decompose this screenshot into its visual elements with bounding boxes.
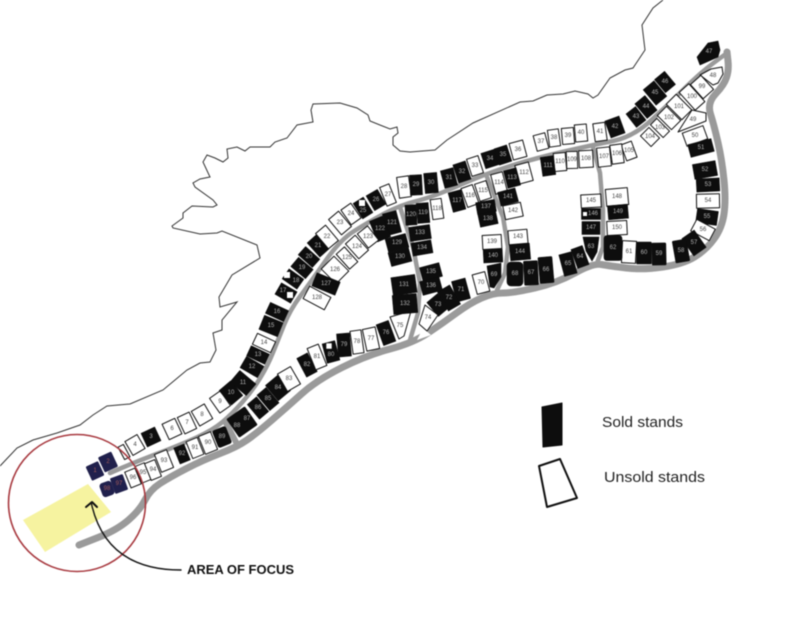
stands: upper row 3 to 16: 4 bbox=[133, 442, 137, 448]
stands: central block 118 to 136: 128 bbox=[312, 295, 323, 301]
stands: upper row 31 to 47: 46 bbox=[662, 79, 669, 85]
stands: lower row 75 to 82: 77 bbox=[368, 336, 375, 342]
stands: north-east cluster 48, 99 to 104: 104 bbox=[645, 134, 656, 140]
stands: upper row 17 to 30: 26 bbox=[373, 197, 380, 203]
stands: upper row 31 to 47: 41 bbox=[597, 129, 604, 135]
stands: centre blocks 112 to 117 and 137 to 147: 115 bbox=[478, 188, 488, 194]
stands: eastern loop 49 to 62: 53 bbox=[705, 182, 712, 188]
stands: central block 118 to 136: 122 bbox=[375, 226, 386, 232]
stands: southern row 63 to 73: 66 bbox=[543, 267, 550, 273]
legend: sold stands bbox=[542, 403, 683, 447]
stands: upper row 17 to 30: 23 bbox=[337, 220, 344, 226]
stands: upper row 17 to 30: 29 bbox=[413, 182, 420, 188]
stands: branch 105 to 111 and 148 to 150 bbox=[540, 141, 637, 236]
stands: upper row 31 to 47: 34 bbox=[487, 156, 494, 162]
stands: central block 118 to 136: 127 bbox=[321, 281, 332, 287]
stands: upper row 31 to 47: 37 bbox=[538, 139, 545, 145]
area of focus caption: AREA OF FOCUS bbox=[187, 563, 294, 577]
stands: lower row 83 to 96: 93 bbox=[161, 458, 168, 464]
stands: lower row 75 to 82: 76 bbox=[383, 330, 390, 336]
stands: upper row 3 to 16: 15 bbox=[268, 323, 275, 329]
stands: upper row 31 to 47: 42 bbox=[612, 124, 619, 130]
stands: upper row 31 to 47: 39 bbox=[565, 133, 572, 139]
stands: eastern loop 49 to 62: 51 bbox=[698, 145, 705, 151]
stands: lower row 75 to 82: 78 bbox=[354, 339, 361, 345]
stands: upper row 31 to 47: 33 bbox=[472, 163, 479, 169]
stands: upper row 31 to 47: 31 bbox=[446, 175, 453, 181]
stands: centre blocks 112 to 117 and 137 to 147: 138 bbox=[483, 216, 494, 222]
stands: centre blocks 112 to 117 and 137 to 147: 147 bbox=[586, 225, 597, 231]
stands: centre blocks 112 to 117 and 137 to 147: 112 bbox=[519, 170, 529, 176]
stands: north-east cluster 48, 99 to 104 bbox=[640, 67, 723, 147]
stands: upper row 17 to 30: 27 bbox=[385, 192, 392, 198]
stands: eastern loop 49 to 62: 52 bbox=[702, 167, 709, 173]
road network bbox=[79, 52, 728, 545]
stands: lower row 83 to 96: 90 bbox=[205, 440, 212, 446]
stands: southern row 63 to 73: 64 bbox=[577, 254, 584, 260]
stands: central block 118 to 136: 125 bbox=[342, 255, 353, 261]
stands: centre blocks 112 to 117 and 137 to 147: 114 bbox=[494, 180, 504, 186]
stands: central block 118 to 136: 129 bbox=[392, 240, 403, 246]
stands: central block 118 to 136: 120 bbox=[406, 212, 417, 218]
white wedge between roads near stand 74 bbox=[417, 328, 431, 340]
stands: branch 105 to 111 and 148 to 150: 107 bbox=[599, 154, 610, 160]
stands: eastern loop 49 to 62: 62 bbox=[610, 245, 617, 251]
stands: branch 105 to 111 and 148 to 150: 149 bbox=[613, 209, 624, 215]
stands: central block 118 to 136 bbox=[303, 198, 444, 315]
stands: branch 105 to 111 and 148 to 150: 110 bbox=[555, 159, 565, 165]
stands: central block 118 to 136: 126 bbox=[330, 267, 341, 273]
stands: southern row 63 to 73 bbox=[419, 237, 599, 331]
stands: upper row 31 to 47: 43 bbox=[633, 114, 640, 120]
stands: southern row 63 to 73: 71 bbox=[458, 287, 465, 293]
stands: central block 118 to 136: 121 bbox=[387, 220, 398, 226]
stands: central block 118 to 136: 130 bbox=[395, 254, 406, 260]
stands: upper row 17 to 30: 25 bbox=[360, 208, 367, 214]
stands: lower row 83 to 96: 86 bbox=[255, 405, 262, 411]
stands: lower row 83 to 96: 84 bbox=[275, 385, 282, 391]
stands: centre blocks 112 to 117 and 137 to 147: 141 bbox=[503, 194, 514, 200]
stands: lower row 83 to 96: 88 bbox=[234, 423, 241, 429]
stands: eastern loop 49 to 62: 54 bbox=[705, 198, 712, 204]
stands: lower row 83 to 96: 83 bbox=[286, 376, 293, 382]
stands: upper row 31 to 47: 45 bbox=[652, 90, 659, 96]
stands: upper row 31 to 47: 40 bbox=[578, 130, 585, 136]
stands: upper row 17 to 30: 18 bbox=[293, 278, 300, 284]
stands: central block 118 to 136: 131 bbox=[399, 282, 410, 288]
stands: north-east cluster 48, 99 to 104: 103 bbox=[655, 125, 666, 131]
stands: north-east cluster 48, 99 to 104: 48 bbox=[710, 73, 717, 79]
stands: centre blocks 112 to 117 and 137 to 147: 113 bbox=[507, 175, 517, 181]
stands: central block 118 to 136: 124 bbox=[352, 244, 363, 250]
stands: upper row 3 to 16 bbox=[118, 302, 289, 460]
stands: southern row 63 to 73: 70 bbox=[478, 280, 485, 286]
stands: upper row 17 to 30: 21 bbox=[315, 243, 322, 249]
stands: centre blocks 112 to 117 and 137 to 147: 143 bbox=[513, 234, 524, 240]
stands: branch 105 to 111 and 148 to 150: 109 bbox=[567, 157, 578, 163]
stands: eastern loop 49 to 62 bbox=[604, 110, 720, 265]
stands: north-east cluster 48, 99 to 104: 101 bbox=[674, 104, 685, 110]
stands: upper row 3 to 16: 8 bbox=[200, 412, 204, 418]
stands: lower row 83 to 96: 92 bbox=[179, 451, 186, 457]
stands: central block 118 to 136: 133 bbox=[415, 230, 426, 236]
stands: upper row 17 to 30: 17 bbox=[280, 288, 287, 294]
stands: north-east cluster 48, 99 to 104: 100 bbox=[687, 94, 698, 100]
stands: centre blocks 112 to 117 and 137 to 147: 117 bbox=[452, 198, 462, 204]
stands: area of focus, navy stands 1, 2, 97, 98: 1 bbox=[93, 468, 97, 474]
stands: north-east cluster 48, 99 to 104: 102 bbox=[664, 115, 675, 121]
stands: lower row 83 to 96: 89 bbox=[219, 434, 226, 440]
stands: lower row 83 to 96: 91 bbox=[192, 445, 199, 451]
stands: north-east cluster 48, 99 to 104: 99 bbox=[699, 84, 706, 90]
stands: southern row 63 to 73: 72 bbox=[446, 295, 453, 301]
stands: centre blocks 112 to 117 and 137 to 147: 146 bbox=[588, 211, 599, 217]
arrow to area of focus bbox=[86, 502, 181, 570]
stands: central block 118 to 136: 135 bbox=[426, 269, 437, 275]
stands: southern row 63 to 73: 68 bbox=[512, 271, 519, 277]
stands: centre blocks 112 to 117 and 137 to 147 bbox=[448, 162, 601, 263]
stands: upper row 17 to 30: 22 bbox=[324, 234, 331, 240]
stands: upper row 31 to 47: 32 bbox=[459, 169, 466, 175]
legend: sold stands: Sold stands bbox=[602, 414, 683, 431]
stands: upper row 31 to 47: 38 bbox=[551, 135, 558, 141]
coastline boundary bbox=[0, 0, 663, 466]
stands: central block 118 to 136: 136 bbox=[426, 283, 437, 289]
stands: centre blocks 112 to 117 and 137 to 147: 144 bbox=[515, 249, 526, 255]
stands: upper row 31 to 47: 36 bbox=[515, 147, 522, 153]
stands: lower row 83 to 96: 87 bbox=[244, 416, 251, 422]
stands: lower row 83 to 96: 85 bbox=[265, 396, 272, 402]
stands: centre blocks 112 to 117 and 137 to 147: 140 bbox=[488, 253, 499, 259]
stands: area of focus, navy stands 1, 2, 97, 98: 98 bbox=[104, 486, 111, 492]
stands: southern row 63 to 73: 63 bbox=[588, 244, 595, 250]
stands: southern row 63 to 73: 69 bbox=[491, 272, 498, 278]
stands: upper row 17 to 30: 30 bbox=[428, 180, 435, 186]
stands: eastern loop 49 to 62: 49 bbox=[690, 117, 697, 123]
stands: southern row 63 to 73: 73 bbox=[435, 302, 442, 308]
stands: upper row 31 to 47: 47 bbox=[706, 49, 713, 55]
stands: upper row 3 to 16: 16 bbox=[274, 309, 281, 315]
legend: unsold stands: Unsold stands bbox=[604, 469, 705, 486]
stands: southern row 63 to 73: 67 bbox=[528, 270, 535, 276]
stands: branch 105 to 111 and 148 to 150: 108 bbox=[581, 156, 592, 162]
stands: eastern loop 49 to 62: 50 bbox=[692, 133, 699, 139]
stands: centre blocks 112 to 117 and 137 to 147: 142 bbox=[508, 208, 519, 214]
stands: branch 105 to 111 and 148 to 150: 111 bbox=[543, 163, 553, 169]
stands: upper row 17 to 30: 19 bbox=[299, 265, 306, 271]
stands: upper row 31 to 47: 44 bbox=[643, 104, 650, 110]
stands: upper row 31 to 47: 35 bbox=[500, 152, 507, 158]
stands: upper row 3 to 16: 6 bbox=[170, 426, 174, 432]
stands: lower row 75 to 82: 75 bbox=[397, 323, 404, 329]
stands: eastern loop 49 to 62: 57 bbox=[691, 240, 698, 246]
stands: upper row 3 to 16: 7 bbox=[185, 420, 189, 426]
stands: lower row 83 to 96: 96 bbox=[130, 475, 137, 481]
stands: eastern loop 49 to 62: 60 bbox=[641, 250, 648, 256]
stands: southern row 63 to 73: 65 bbox=[565, 261, 572, 267]
stands: upper row 17 to 30 bbox=[275, 172, 438, 303]
stands: area of focus, navy stands 1, 2, 97, 98 bbox=[86, 452, 128, 498]
stands: upper row 3 to 16: 9 bbox=[218, 399, 222, 405]
yellow area of focus site bbox=[23, 484, 111, 552]
stands: centre blocks 112 to 117 and 137 to 147: 116 bbox=[465, 193, 475, 199]
stands: centre blocks 112 to 117 and 137 to 147: 145 bbox=[586, 198, 597, 204]
stands: lower row 83 to 96 bbox=[125, 367, 300, 488]
stands: lower row 83 to 96: 95 bbox=[140, 470, 147, 476]
stands: branch 105 to 111 and 148 to 150: 148 bbox=[612, 194, 623, 200]
stands: upper row 3 to 16: 10 bbox=[228, 390, 235, 396]
stands: eastern loop 49 to 62: 59 bbox=[656, 251, 663, 257]
stands: centre blocks 112 to 117 and 137 to 147: 139 bbox=[487, 239, 498, 245]
stands: area of focus, navy stands 1, 2, 97, 98: 97 bbox=[116, 481, 123, 487]
stands: upper row 17 to 30: 20 bbox=[306, 254, 313, 260]
stands: upper row 31 to 47 bbox=[440, 41, 720, 188]
stands: eastern loop 49 to 62: 58 bbox=[678, 248, 685, 254]
stands: lower row 75 to 82: 81 bbox=[314, 354, 321, 360]
stands: upper row 17 to 30: 24 bbox=[348, 211, 355, 217]
stands: eastern loop 49 to 62: 55 bbox=[704, 214, 711, 220]
stands: upper row 3 to 16: 13 bbox=[255, 352, 262, 358]
stands: southern row 63 to 73: 74 bbox=[425, 315, 432, 321]
stands: centre blocks 112 to 117 and 137 to 147: 137 bbox=[481, 204, 492, 210]
stands: upper row 3 to 16: 14 bbox=[261, 340, 268, 346]
stands: central block 118 to 136: 119 bbox=[418, 210, 428, 216]
stands: central block 118 to 136: 118 bbox=[432, 206, 442, 212]
stands: lower row 75 to 82: 79 bbox=[341, 342, 348, 348]
stands: lower row 75 to 82 bbox=[297, 311, 411, 377]
stands: upper row 3 to 16: 3 bbox=[149, 434, 153, 440]
stands: central block 118 to 136: 134 bbox=[417, 245, 428, 251]
stands: branch 105 to 111 and 148 to 150: 105 bbox=[624, 148, 635, 154]
stands: area of focus, navy stands 1, 2, 97, 98: 2 bbox=[106, 459, 110, 465]
stands: upper row 3 to 16: 12 bbox=[249, 364, 256, 370]
stands: upper row 3 to 16: 11 bbox=[240, 380, 247, 386]
stands: branch 105 to 111 and 148 to 150: 150 bbox=[612, 225, 623, 231]
stands: branch 105 to 111 and 148 to 150: 106 bbox=[612, 151, 623, 157]
red circle around area of focus bbox=[8, 434, 146, 572]
stands: lower row 75 to 82: 80 bbox=[328, 352, 335, 358]
stands: central block 118 to 136: 132 bbox=[400, 301, 411, 307]
stands: central block 118 to 136: 123 bbox=[363, 234, 374, 240]
legend: unsold stands bbox=[539, 459, 705, 507]
stands: lower row 75 to 82: 82 bbox=[304, 362, 311, 368]
stands: upper row 17 to 30: 28 bbox=[401, 184, 408, 190]
stands: lower row 83 to 96: 94 bbox=[150, 467, 157, 473]
stands: eastern loop 49 to 62: 56 bbox=[700, 227, 707, 233]
stands: eastern loop 49 to 62: 61 bbox=[626, 249, 633, 255]
